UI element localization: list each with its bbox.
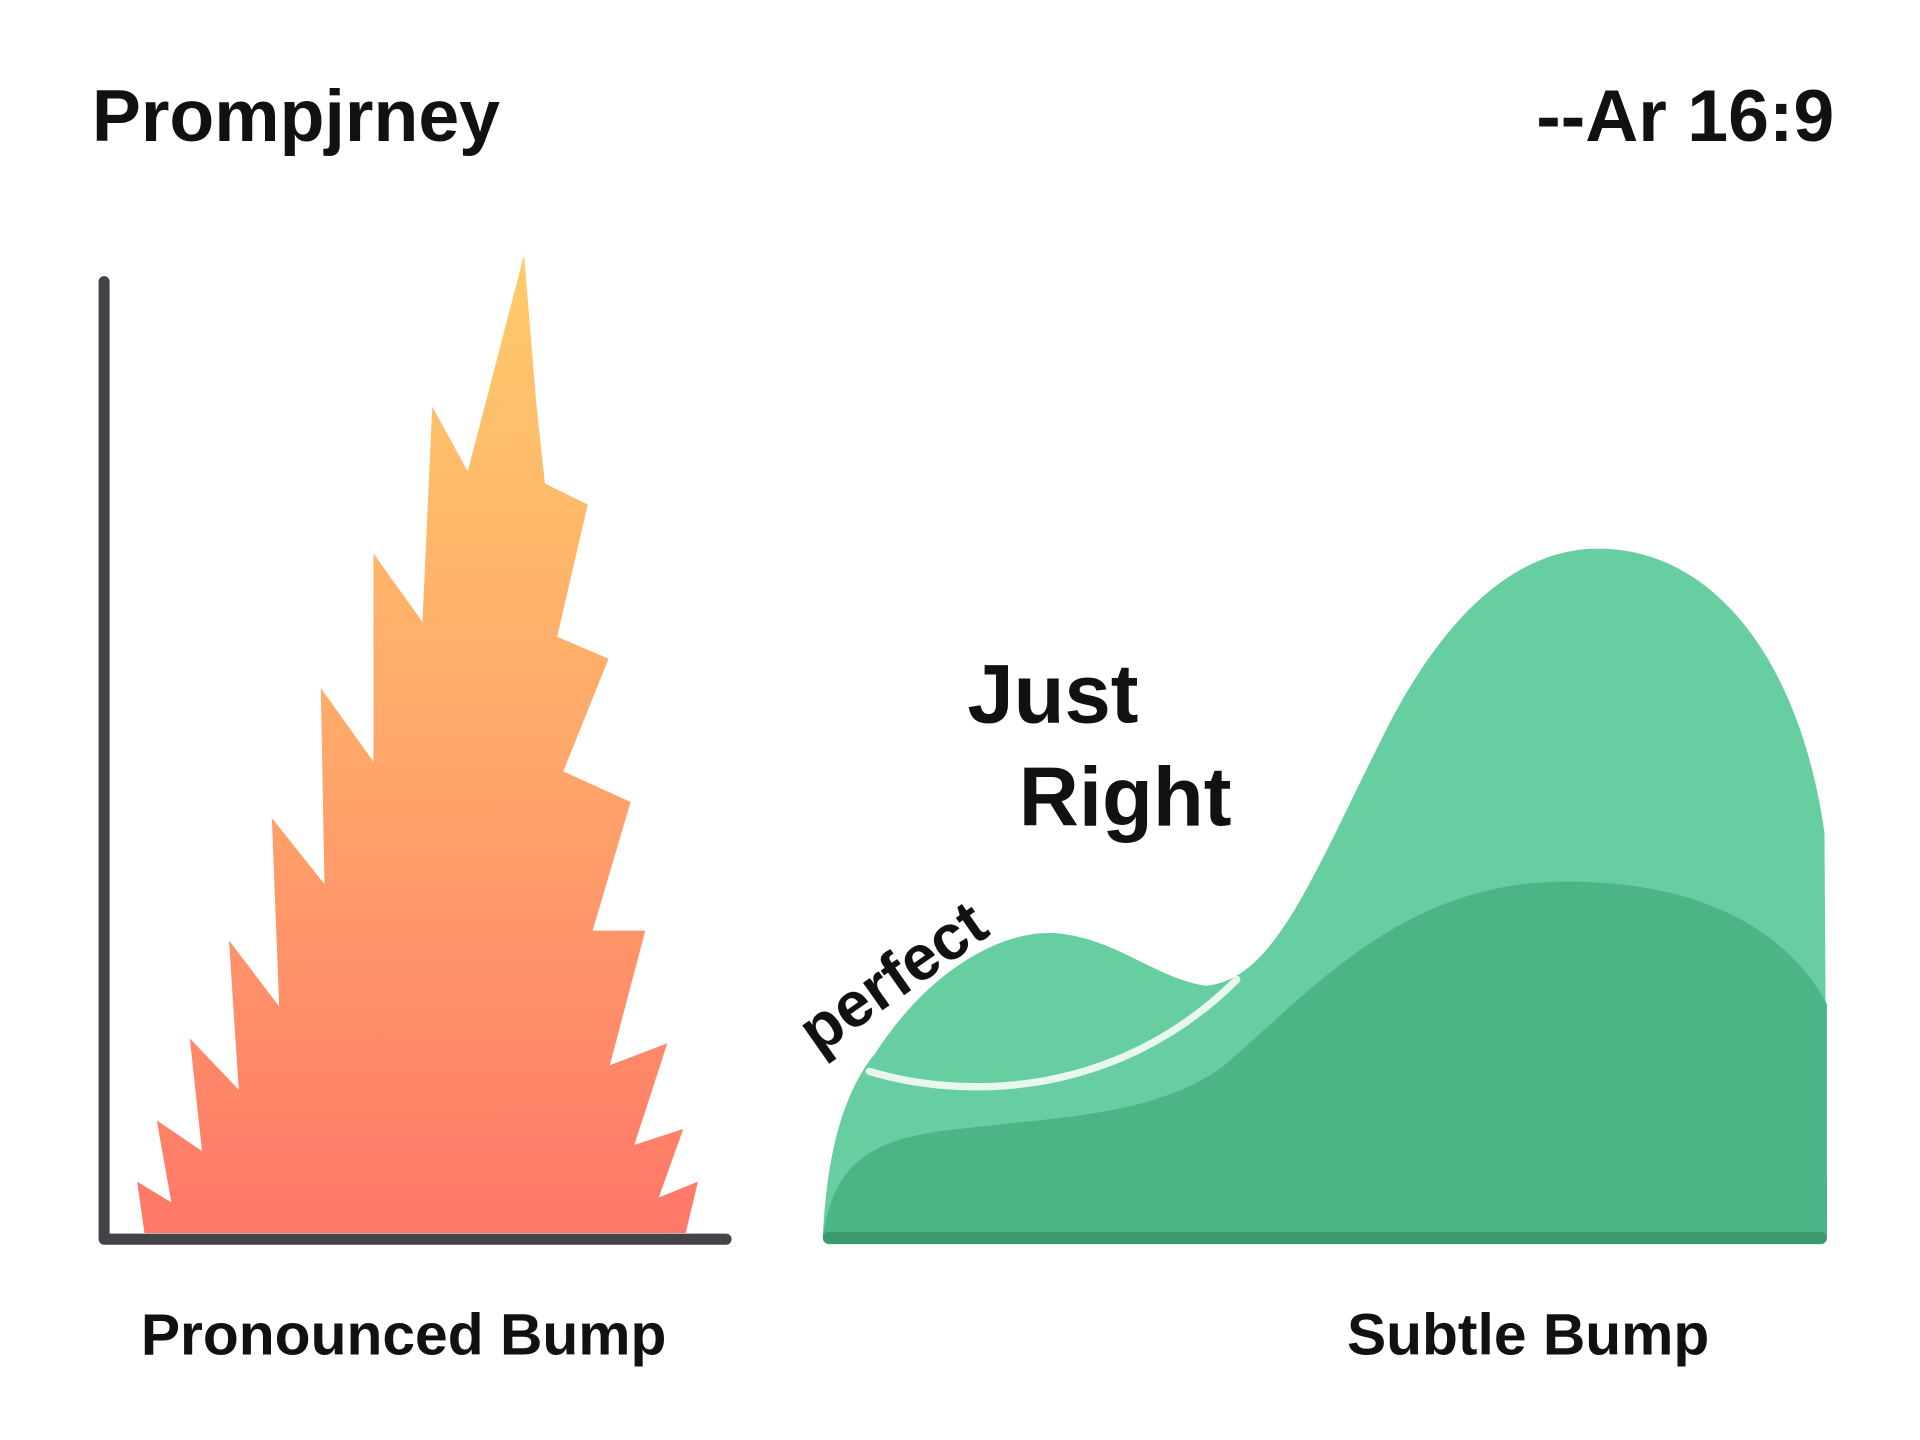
spiky chart: pronounced bump	[104, 255, 726, 1239]
label: Just Right	[967, 647, 1231, 843]
baseline	[823, 1232, 1827, 1244]
white arc	[869, 980, 1237, 1087]
aspect ratio label: --Ar 16:9	[1536, 74, 1834, 157]
spiky shape	[137, 255, 698, 1233]
front dark green hill	[823, 882, 1827, 1237]
green chart: subtle bump	[823, 549, 1827, 1244]
title: Prompjrney	[92, 74, 500, 157]
label: Pronounced Bump: Pronounced Bump	[141, 1302, 666, 1367]
axes	[104, 282, 726, 1239]
label: Just Right: Just	[967, 647, 1139, 740]
label: Subtle Bump: Subtle Bump	[1347, 1302, 1709, 1367]
back light green hill	[823, 549, 1827, 1237]
label: perfect: perfect	[785, 887, 1000, 1067]
label: Just Right: Right	[1019, 750, 1231, 843]
